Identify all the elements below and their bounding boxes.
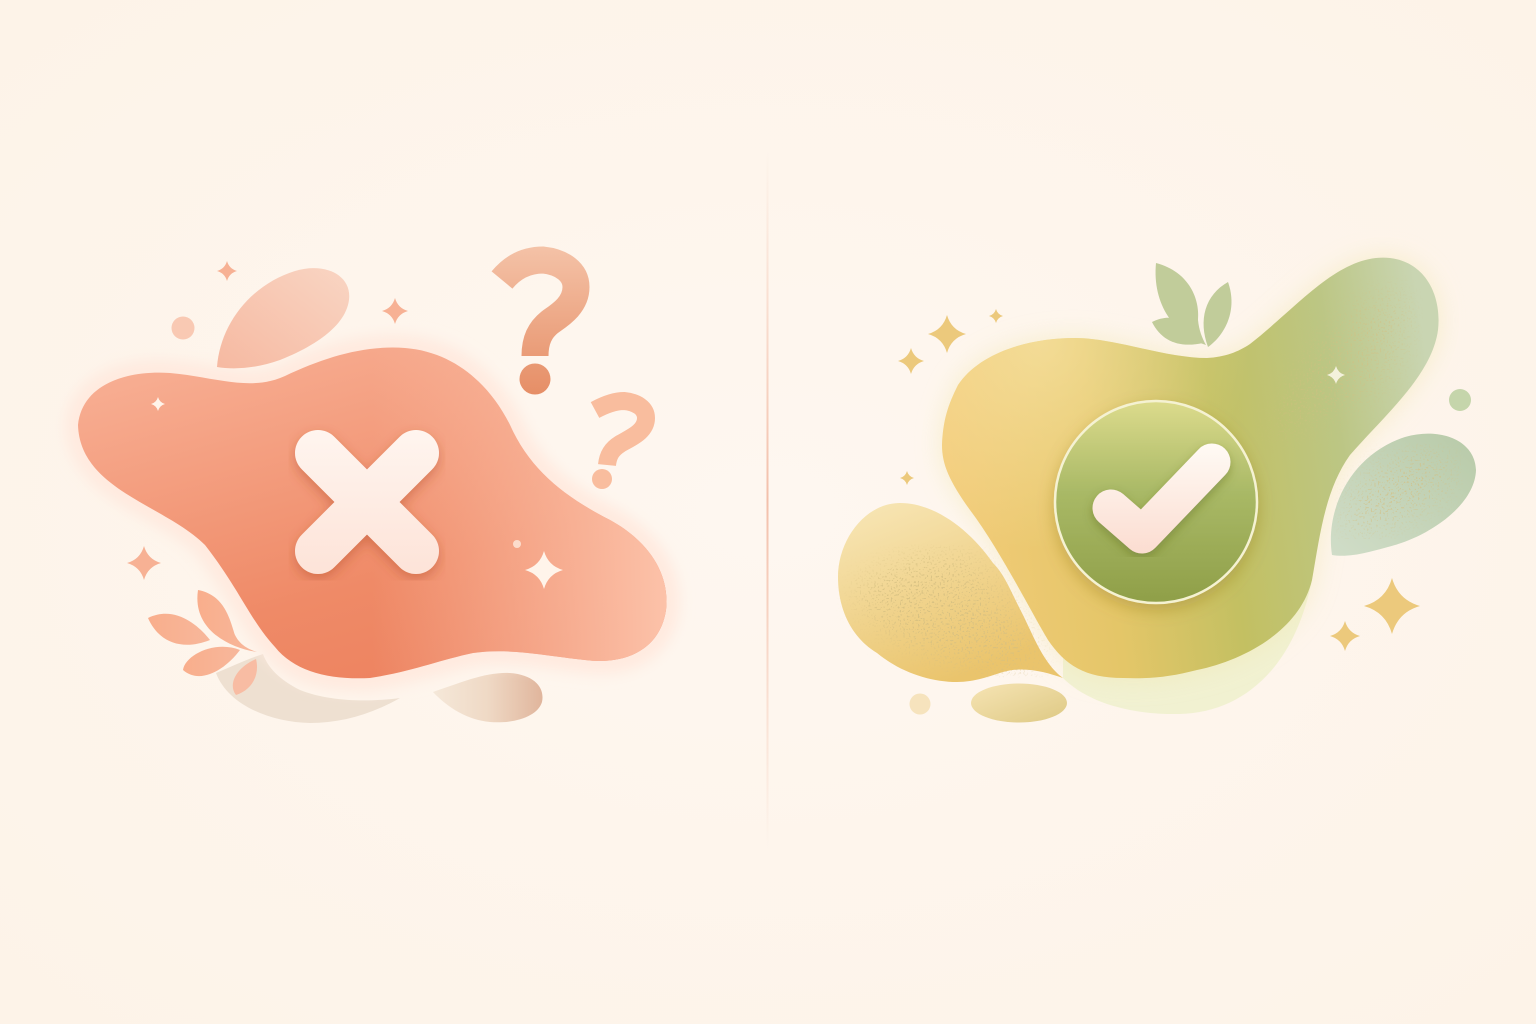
- speckle on blob: [1270, 290, 1409, 440]
- blob glow: [78, 348, 667, 678]
- yellow drop: [838, 503, 1063, 682]
- speckle on leaf: [1345, 452, 1452, 531]
- main gradient blob: [942, 258, 1439, 678]
- faded shape under blob: [216, 654, 400, 723]
- blob tonal overlay: [942, 258, 1439, 678]
- icon: leaf sprig: [1152, 263, 1231, 347]
- icon: gold sparkles: [898, 309, 1420, 651]
- check circle: [1055, 401, 1257, 603]
- blob light tint: [78, 348, 667, 678]
- panel: right side: [838, 258, 1476, 722]
- icon: large question mark: [502, 260, 576, 394]
- icon: check mark: [1111, 462, 1212, 535]
- pale halo shape: [1063, 500, 1318, 714]
- icon: sparkles: [127, 261, 408, 580]
- main coral blob: [78, 348, 667, 678]
- icon: dot: [172, 316, 194, 340]
- sage leaf: [1331, 434, 1476, 556]
- icon: small question mark: [592, 401, 646, 489]
- icon: X mark: [318, 453, 416, 551]
- icon: top leaf: [217, 268, 349, 368]
- pebble: [433, 673, 543, 722]
- icon: white sparkles: [151, 397, 563, 589]
- panel: wrong side: [78, 260, 667, 723]
- speckle on drop: [855, 556, 1045, 666]
- icon: dots: [910, 389, 1471, 714]
- pebble: [971, 684, 1067, 722]
- blob glow: [942, 258, 1439, 678]
- icon: pale sparkle: [1327, 366, 1345, 384]
- icon: leaf sprig: [148, 590, 257, 695]
- center divider: [766, 150, 768, 850]
